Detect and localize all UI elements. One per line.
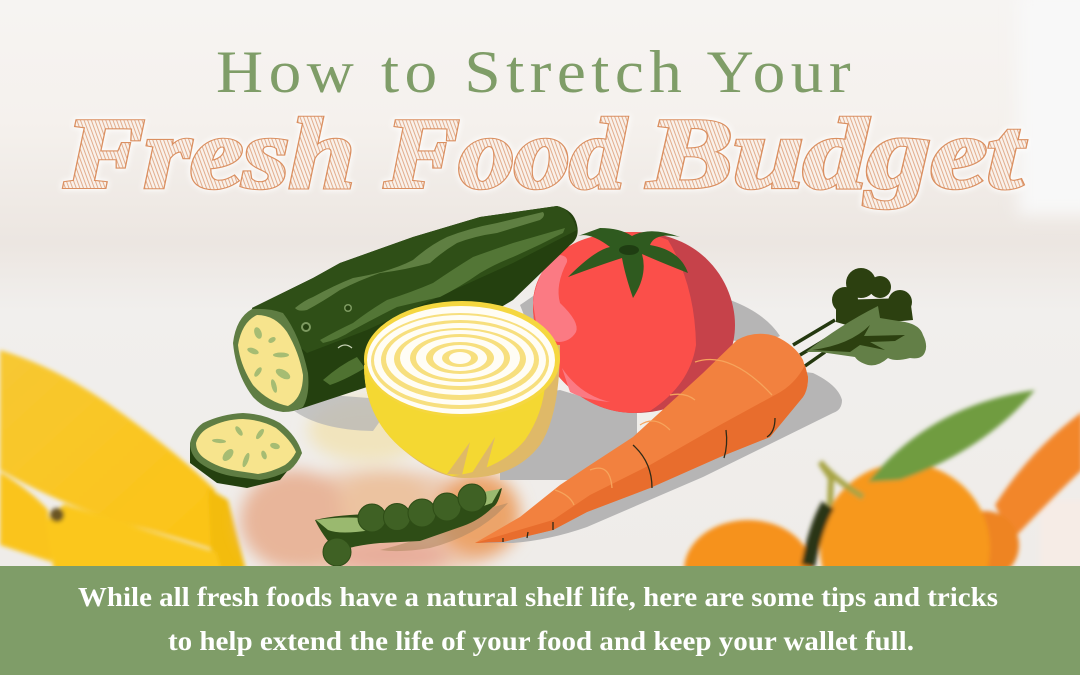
intro text line two: to help extend the life of your food and keep your wallet full. [168,626,914,656]
pea pod [315,484,508,566]
onion [364,301,560,478]
tomato [533,228,735,413]
title line two: Budget [647,98,1026,209]
title line two: Fresh [64,98,355,209]
carrot [475,334,808,543]
intro banner [0,566,1080,675]
food illustration [190,206,926,566]
title line one: How to Stretch Your [216,39,856,105]
intro text line one: While all fresh foods have a natural shelf life, here are some tips and tricks [78,582,998,612]
title line two: Budget [647,98,1026,209]
title line two: Food [384,98,627,209]
blurred bananas [0,350,246,572]
cucumber [233,206,578,412]
title line two: Fresh [64,98,355,209]
cucumber slice [190,413,302,488]
blurred jar [240,398,520,580]
title line two [64,98,1026,209]
title line two: Fresh [64,98,355,209]
title line two: Food [384,98,627,209]
title line two: Budget [647,98,1026,209]
blurred oranges [684,390,1080,633]
cast shadows [293,288,842,543]
title line two: Food [384,98,627,209]
carrot greens [793,268,926,366]
